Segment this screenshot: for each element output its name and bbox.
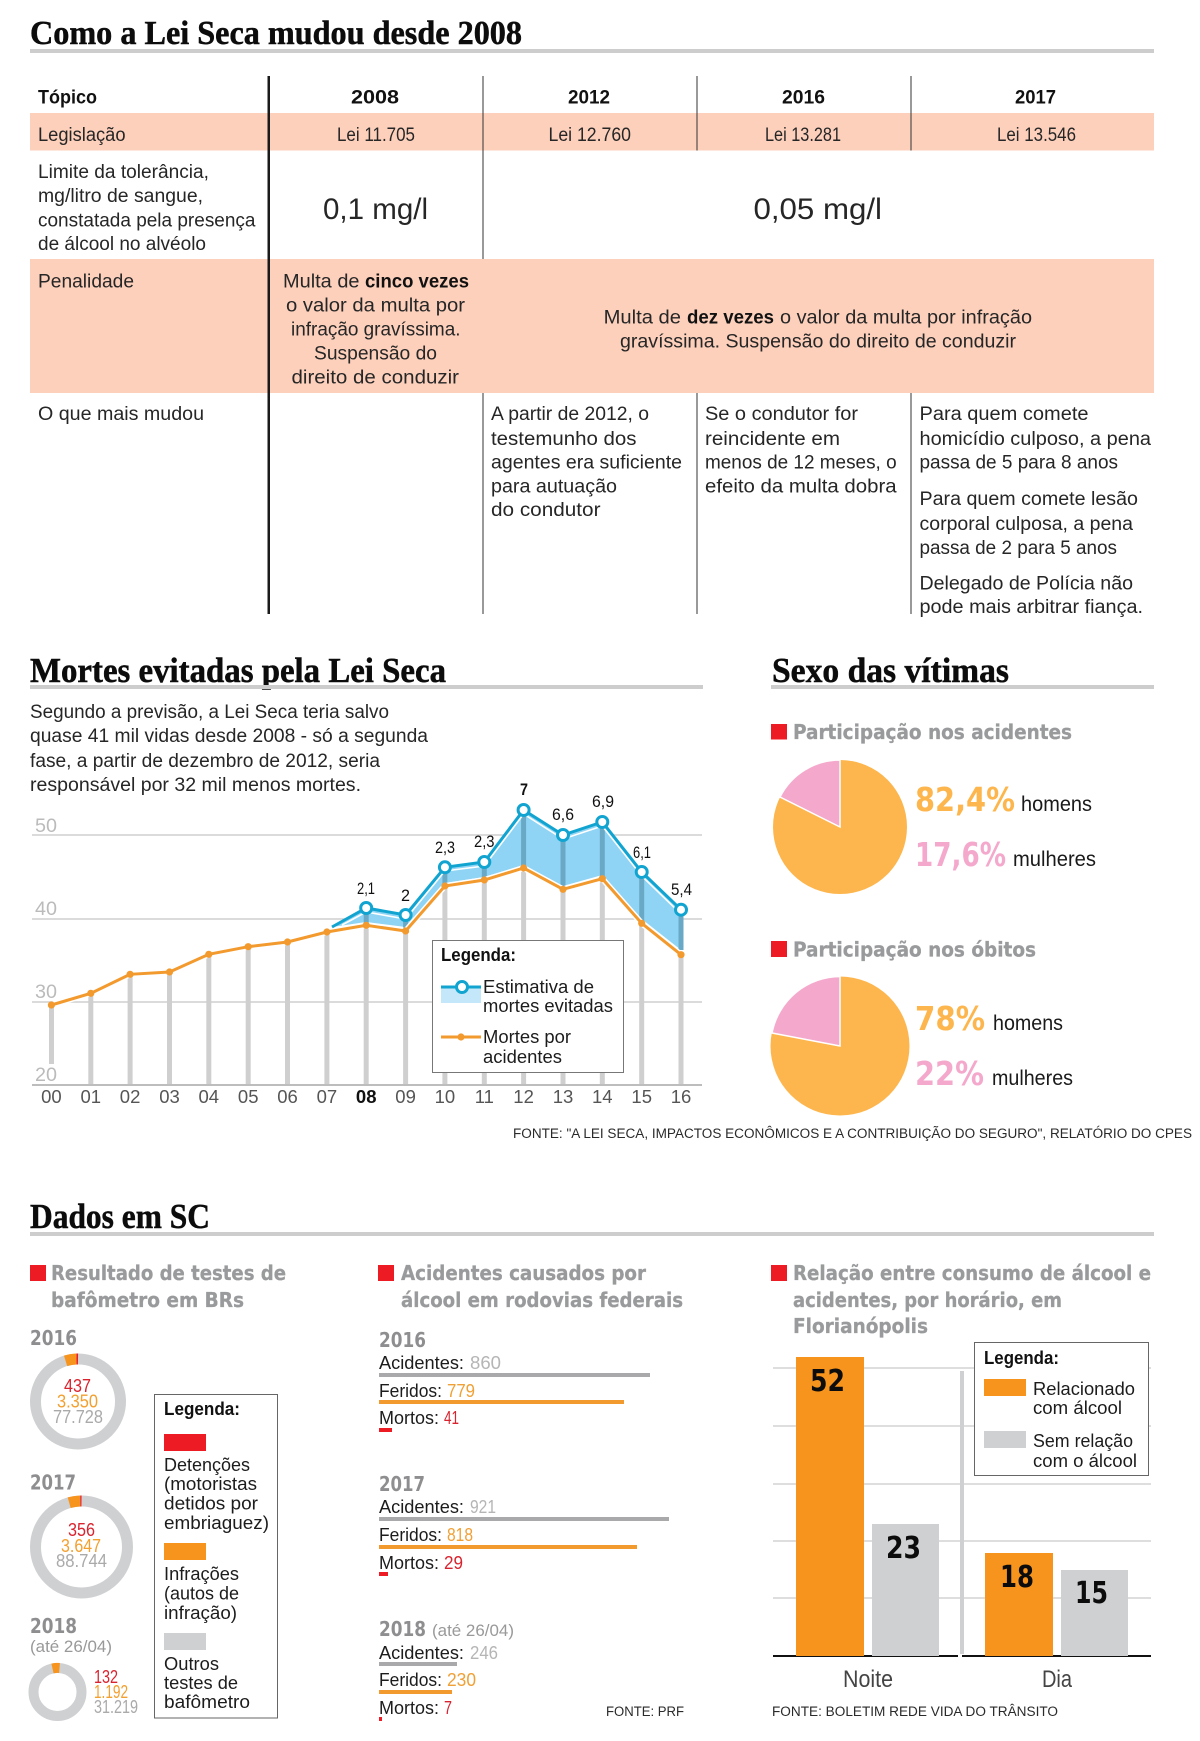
y axis labels: 40: [35, 899, 57, 920]
row: legislação: Lei 13.281: [765, 125, 841, 146]
panel: acidentes em rodovias federais: [378, 1261, 684, 1721]
section: dados em SC: [30, 1197, 1154, 1721]
bar values: [810, 1364, 1108, 1611]
bars 2018: 230: [447, 1670, 476, 1690]
x axis labels: 03: [159, 1086, 180, 1107]
donut 2018: 2018: [30, 1614, 77, 1638]
x axis labels: 00: [41, 1086, 62, 1107]
row: limite da tolerância: Limite da tolerância,: [38, 162, 209, 183]
row: o que mais mudou: O que mais mudou: [38, 404, 204, 425]
donut 2018: [30, 1614, 138, 1717]
donut 2017: [30, 1470, 128, 1593]
bar chart legend: com álcool: [1033, 1398, 1122, 1418]
value labels: 2,1: [357, 879, 375, 898]
bars 2016: 860: [470, 1353, 501, 1373]
row: o que mais mudou: Delegado de Polícia não: [920, 574, 1133, 594]
bars 2018: 7: [444, 1698, 452, 1718]
x axis labels: 14: [592, 1086, 613, 1107]
row: legislação: Lei 12.760: [548, 125, 631, 146]
row: o que mais mudou: testemunho dos: [491, 429, 636, 450]
legend: bafômetro: (motoristas: [164, 1474, 257, 1494]
percentages: acidentes: [915, 780, 1096, 874]
legend: bafômetro: Outros: [164, 1654, 219, 1674]
bars 2017: Mortos:: [379, 1553, 439, 1573]
row: penalidade: direito de conduzir: [292, 368, 460, 388]
bars 2017: 921: [470, 1497, 496, 1517]
subheading: [378, 1261, 683, 1312]
bars 2017: 2017: [379, 1472, 425, 1496]
blue area: mortes evitadas: [332, 810, 681, 950]
percentages: acidentes: homens: [1021, 793, 1092, 816]
bars 2018: Acidentes:: [379, 1643, 464, 1663]
bars: [796, 1357, 1128, 1656]
percentages: óbitos: [915, 999, 1073, 1093]
row: o que mais mudou: [38, 404, 1151, 618]
value labels: 2,3: [474, 832, 494, 851]
percentages: óbitos: 78%: [915, 999, 985, 1038]
table: [30, 76, 1154, 618]
chart legend: Mortes por: [483, 1027, 571, 1047]
row: limite da tolerância: 0,1 mg/l: [323, 193, 428, 226]
legend: bafômetro: bafômetro: [164, 1692, 250, 1712]
bars 2017: Feridos:: [379, 1525, 442, 1545]
row: o que mais mudou: pode mais arbitrar fiança.: [920, 597, 1143, 618]
heading: Sexo das vítimas: [772, 651, 1009, 690]
bars 2017: [379, 1472, 669, 1576]
bars 2017: 29: [444, 1553, 463, 1573]
legend: bafômetro: Detenções: [164, 1455, 250, 1475]
bars 2018: 246: [470, 1643, 498, 1663]
row: o que mais mudou: reincidente em: [705, 429, 840, 450]
row: o que mais mudou: A partir de 2012, o: [491, 404, 649, 425]
subheading: óbitos: Participação nos óbitos: [793, 938, 1036, 962]
intro text: quase 41 mil vidas desde 2008 - só a segunda: [30, 726, 428, 747]
table header row: 2012: [568, 88, 610, 108]
blue line: estimativa: [332, 804, 686, 927]
chart legend: mortes evitadas: [483, 996, 613, 1016]
donut 2017: 88.744: [56, 1551, 107, 1571]
x axis labels: 08: [356, 1086, 376, 1107]
donut 2017: 2017: [30, 1470, 76, 1494]
x axis labels: 15: [631, 1086, 652, 1107]
subheading: acidentes, por horário, em: [793, 1288, 1062, 1312]
x axis labels: 02: [120, 1086, 140, 1107]
y axis labels: 20: [35, 1065, 57, 1086]
bar values: 23: [886, 1531, 921, 1566]
row: legislação: [38, 125, 1076, 146]
row: o que mais mudou: passa de 5 para 8 anos: [920, 452, 1118, 474]
row: legislação: Lei 11.705: [337, 125, 415, 146]
panel: testes de bafômetro: [30, 1261, 286, 1718]
row: o que mais mudou: menos de 12 meses, o: [705, 452, 897, 474]
row: limite da tolerância: 0,05 mg/l: [754, 193, 882, 226]
row: penalidade: Suspensão do: [314, 344, 437, 364]
bars 2016: Mortos:: [379, 1408, 439, 1428]
donut 2018: 1.192: [94, 1682, 128, 1702]
donut 2016: 2016: [30, 1326, 77, 1350]
intro text: responsável por 32 mil menos mortes.: [30, 775, 361, 796]
row: o que mais mudou: corporal culposa, a pena: [920, 514, 1133, 535]
row: penalidade: cinco vezes: [365, 272, 469, 292]
row: penalidade: Penalidade: [38, 272, 134, 292]
x axis labels: 07: [317, 1086, 337, 1107]
row: o que mais mudou: passa de 2 para 5 anos: [920, 538, 1117, 559]
bar values: 15: [1075, 1576, 1108, 1611]
bar chart legend: [974, 1342, 1148, 1476]
bars 2018: [379, 1617, 514, 1721]
pie chart: óbitos: [770, 976, 910, 1116]
x axis labels: 16: [671, 1086, 691, 1107]
category labels: [843, 1666, 1073, 1693]
bars 2018: 2018: [379, 1617, 426, 1641]
source: boletim: FONTE: BOLETIM REDE VIDA DO TRÂNSITO: [772, 1704, 1058, 1719]
bar chart legend: Sem relação: [1033, 1431, 1133, 1451]
donut 2016: [30, 1326, 120, 1444]
row: o que mais mudou: para autuação: [491, 476, 617, 498]
bar chart legend: com o álcool: [1033, 1451, 1137, 1471]
bars 2018: Feridos:: [379, 1670, 442, 1690]
chart legend: [432, 940, 624, 1072]
row: o que mais mudou: do condutor: [491, 500, 601, 521]
panel: consumo de álcool por horário: [771, 1261, 1151, 1719]
donut 2016: 437: [64, 1376, 91, 1396]
bars 2017: 818: [447, 1525, 473, 1545]
x axis labels: 04: [199, 1086, 219, 1107]
y axis labels: 50: [35, 816, 57, 837]
panel: como a Lei Seca mudou: [30, 15, 1154, 618]
table header row: Tópico: [38, 88, 97, 108]
x axis labels: 01: [81, 1086, 101, 1107]
legend: bafômetro: Legenda:: [164, 1399, 240, 1419]
bars 2016: Feridos:: [379, 1381, 442, 1401]
chart legend: Legenda:: [441, 945, 516, 965]
row: legislação: Lei 13.546: [997, 125, 1076, 146]
row: limite da tolerância: de álcool no alvéolo: [38, 234, 206, 255]
heading: Dados em SC: [30, 1197, 210, 1236]
value labels: 7: [520, 780, 528, 799]
source: PRF: FONTE: PRF: [606, 1704, 684, 1719]
percentages: óbitos: homens: [993, 1012, 1063, 1035]
row: o que mais mudou: Se o condutor for: [705, 404, 859, 425]
table header row: 2016: [782, 88, 825, 108]
x axis labels: 12: [513, 1086, 534, 1107]
row: penalidade: Multa de: [604, 308, 681, 328]
legend: bafômetro: embriaguez): [164, 1513, 269, 1533]
bars 2016: Acidentes:: [379, 1353, 464, 1373]
y axis labels: 30: [35, 982, 57, 1003]
legend: bafômetro: (autos de: [164, 1584, 239, 1604]
legend: bafômetro: testes de: [164, 1673, 238, 1693]
donut 2018: (até 26/04): [30, 1637, 112, 1656]
legend: bafômetro: Infrações: [164, 1564, 239, 1584]
bar chart legend: Legenda:: [984, 1348, 1059, 1368]
subheading: Florianópolis: [793, 1314, 928, 1338]
value labels: 2: [401, 886, 410, 905]
title: Como a Lei Seca mudou desde 2008: [30, 15, 522, 52]
value labels: 2,3: [435, 838, 455, 857]
value labels: 6,6: [552, 805, 574, 824]
row: limite da tolerância: mg/litro de sangue,: [38, 186, 203, 207]
source note: FONTE: "A LEI SECA, IMPACTOS ECONÔMICOS E A CONTRIBUIÇÃO DO SEGURO", RELATÓRIO DO CPES: [513, 1126, 1192, 1141]
subheading: [30, 1261, 286, 1312]
value labels: 6,1: [633, 843, 651, 862]
x axis labels: [41, 1086, 691, 1107]
intro text: fase, a partir de dezembro de 2012, seria: [30, 751, 380, 772]
value labels: 6,9: [592, 792, 614, 811]
percentages: acidentes: mulheres: [1013, 848, 1096, 871]
bar chart legend: Relacionado: [1033, 1379, 1135, 1399]
bars 2016: 779: [447, 1381, 475, 1401]
x axis labels: 13: [553, 1086, 573, 1107]
percentages: acidentes: 82,4%: [915, 780, 1015, 819]
row: o que mais mudou: Para quem comete: [920, 404, 1088, 425]
subheading: Acidentes causados por: [401, 1261, 646, 1285]
table header row: 2008: [351, 88, 399, 108]
row: penalidade: infração gravíssima.: [291, 320, 460, 340]
subheading: [771, 1261, 1151, 1338]
percentages: óbitos: mulheres: [992, 1067, 1073, 1090]
row: o que mais mudou: Para quem comete lesão: [920, 489, 1138, 510]
pie chart: acidentes: [773, 760, 907, 894]
chart legend: acidentes: [483, 1047, 562, 1067]
percentages: acidentes: 17,6%: [915, 835, 1006, 874]
category labels: Dia: [1042, 1666, 1073, 1693]
table header row: 2017: [1015, 88, 1056, 108]
value labels: [357, 780, 692, 905]
line chart: [32, 780, 702, 1107]
donut 2016: 3.350: [57, 1392, 98, 1412]
year columns: [49, 868, 684, 1084]
row: o que mais mudou: efeito da multa dobra: [705, 476, 897, 498]
intro text: Segundo a previsão, a Lei Seca teria salvo: [30, 702, 389, 723]
bars 2016: 2016: [379, 1328, 426, 1352]
category labels: Noite: [843, 1666, 893, 1693]
intro text: [30, 702, 428, 796]
value labels: 5,4: [671, 880, 692, 899]
subheading: Resultado de testes de: [51, 1261, 286, 1285]
x axis labels: 06: [277, 1086, 298, 1107]
x axis labels: 05: [238, 1086, 258, 1107]
legend: bafômetro: [154, 1394, 278, 1718]
orange line: mortes por acidentes: [48, 864, 685, 1009]
row: penalidade: dez vezes: [687, 308, 774, 328]
row: legislação: Legislação: [38, 125, 126, 146]
bars 2016: [379, 1328, 650, 1432]
panel: sexo das vítimas: [770, 651, 1154, 1116]
chart legend: Estimativa de: [483, 977, 594, 997]
row: limite da tolerância: constatada pela presença: [38, 210, 256, 232]
table header row: [38, 88, 1056, 108]
bar chart: [773, 1342, 1151, 1693]
row: penalidade: Multa de: [283, 272, 360, 292]
x axis labels: 09: [395, 1086, 416, 1107]
subheading: Relação entre consumo de álcool e: [793, 1261, 1151, 1285]
row: o que mais mudou: homicídio culposo, a pena: [920, 429, 1151, 450]
row: penalidade: o valor da multa por infração: [780, 308, 1032, 328]
heading: Mortes evitadas pela Lei Seca: [30, 651, 446, 690]
legend: bafômetro: infração): [164, 1603, 237, 1623]
subheading: acidentes: Participação nos acidentes: [793, 720, 1072, 744]
row: penalidade: gravíssima. Suspensão do direito de conduzir: [620, 332, 1017, 352]
subheading: bafômetro em BRs: [51, 1288, 244, 1312]
bar values: 18: [1000, 1560, 1034, 1595]
donut 2018: 31.219: [94, 1697, 138, 1717]
subheading: álcool em rodovias federais: [401, 1288, 683, 1312]
panel: mortes evitadas: [30, 651, 703, 1107]
row: penalidade: [38, 272, 1032, 388]
bar values: 52: [810, 1364, 845, 1399]
y axis labels: [35, 816, 57, 1086]
donut 2017: 356: [68, 1520, 95, 1540]
row: penalidade: o valor da multa por: [286, 296, 466, 316]
legend: bafômetro: detidos por: [164, 1494, 258, 1514]
donut 2017: 3.647: [61, 1536, 101, 1556]
x axis labels: 11: [475, 1086, 494, 1107]
bars 2018: Mortos:: [379, 1698, 439, 1718]
bars 2016: 41: [444, 1408, 459, 1428]
percentages: óbitos: 22%: [915, 1054, 984, 1093]
bars 2018: (até 26/04): [432, 1621, 514, 1640]
row: limite da tolerância: [38, 162, 882, 255]
donut 2016: 77.728: [53, 1407, 103, 1427]
row: o que mais mudou: agentes era suficiente: [491, 452, 682, 474]
donut 2018: 132: [94, 1667, 118, 1687]
x axis labels: 10: [435, 1086, 455, 1107]
bars 2017: Acidentes:: [379, 1497, 464, 1517]
